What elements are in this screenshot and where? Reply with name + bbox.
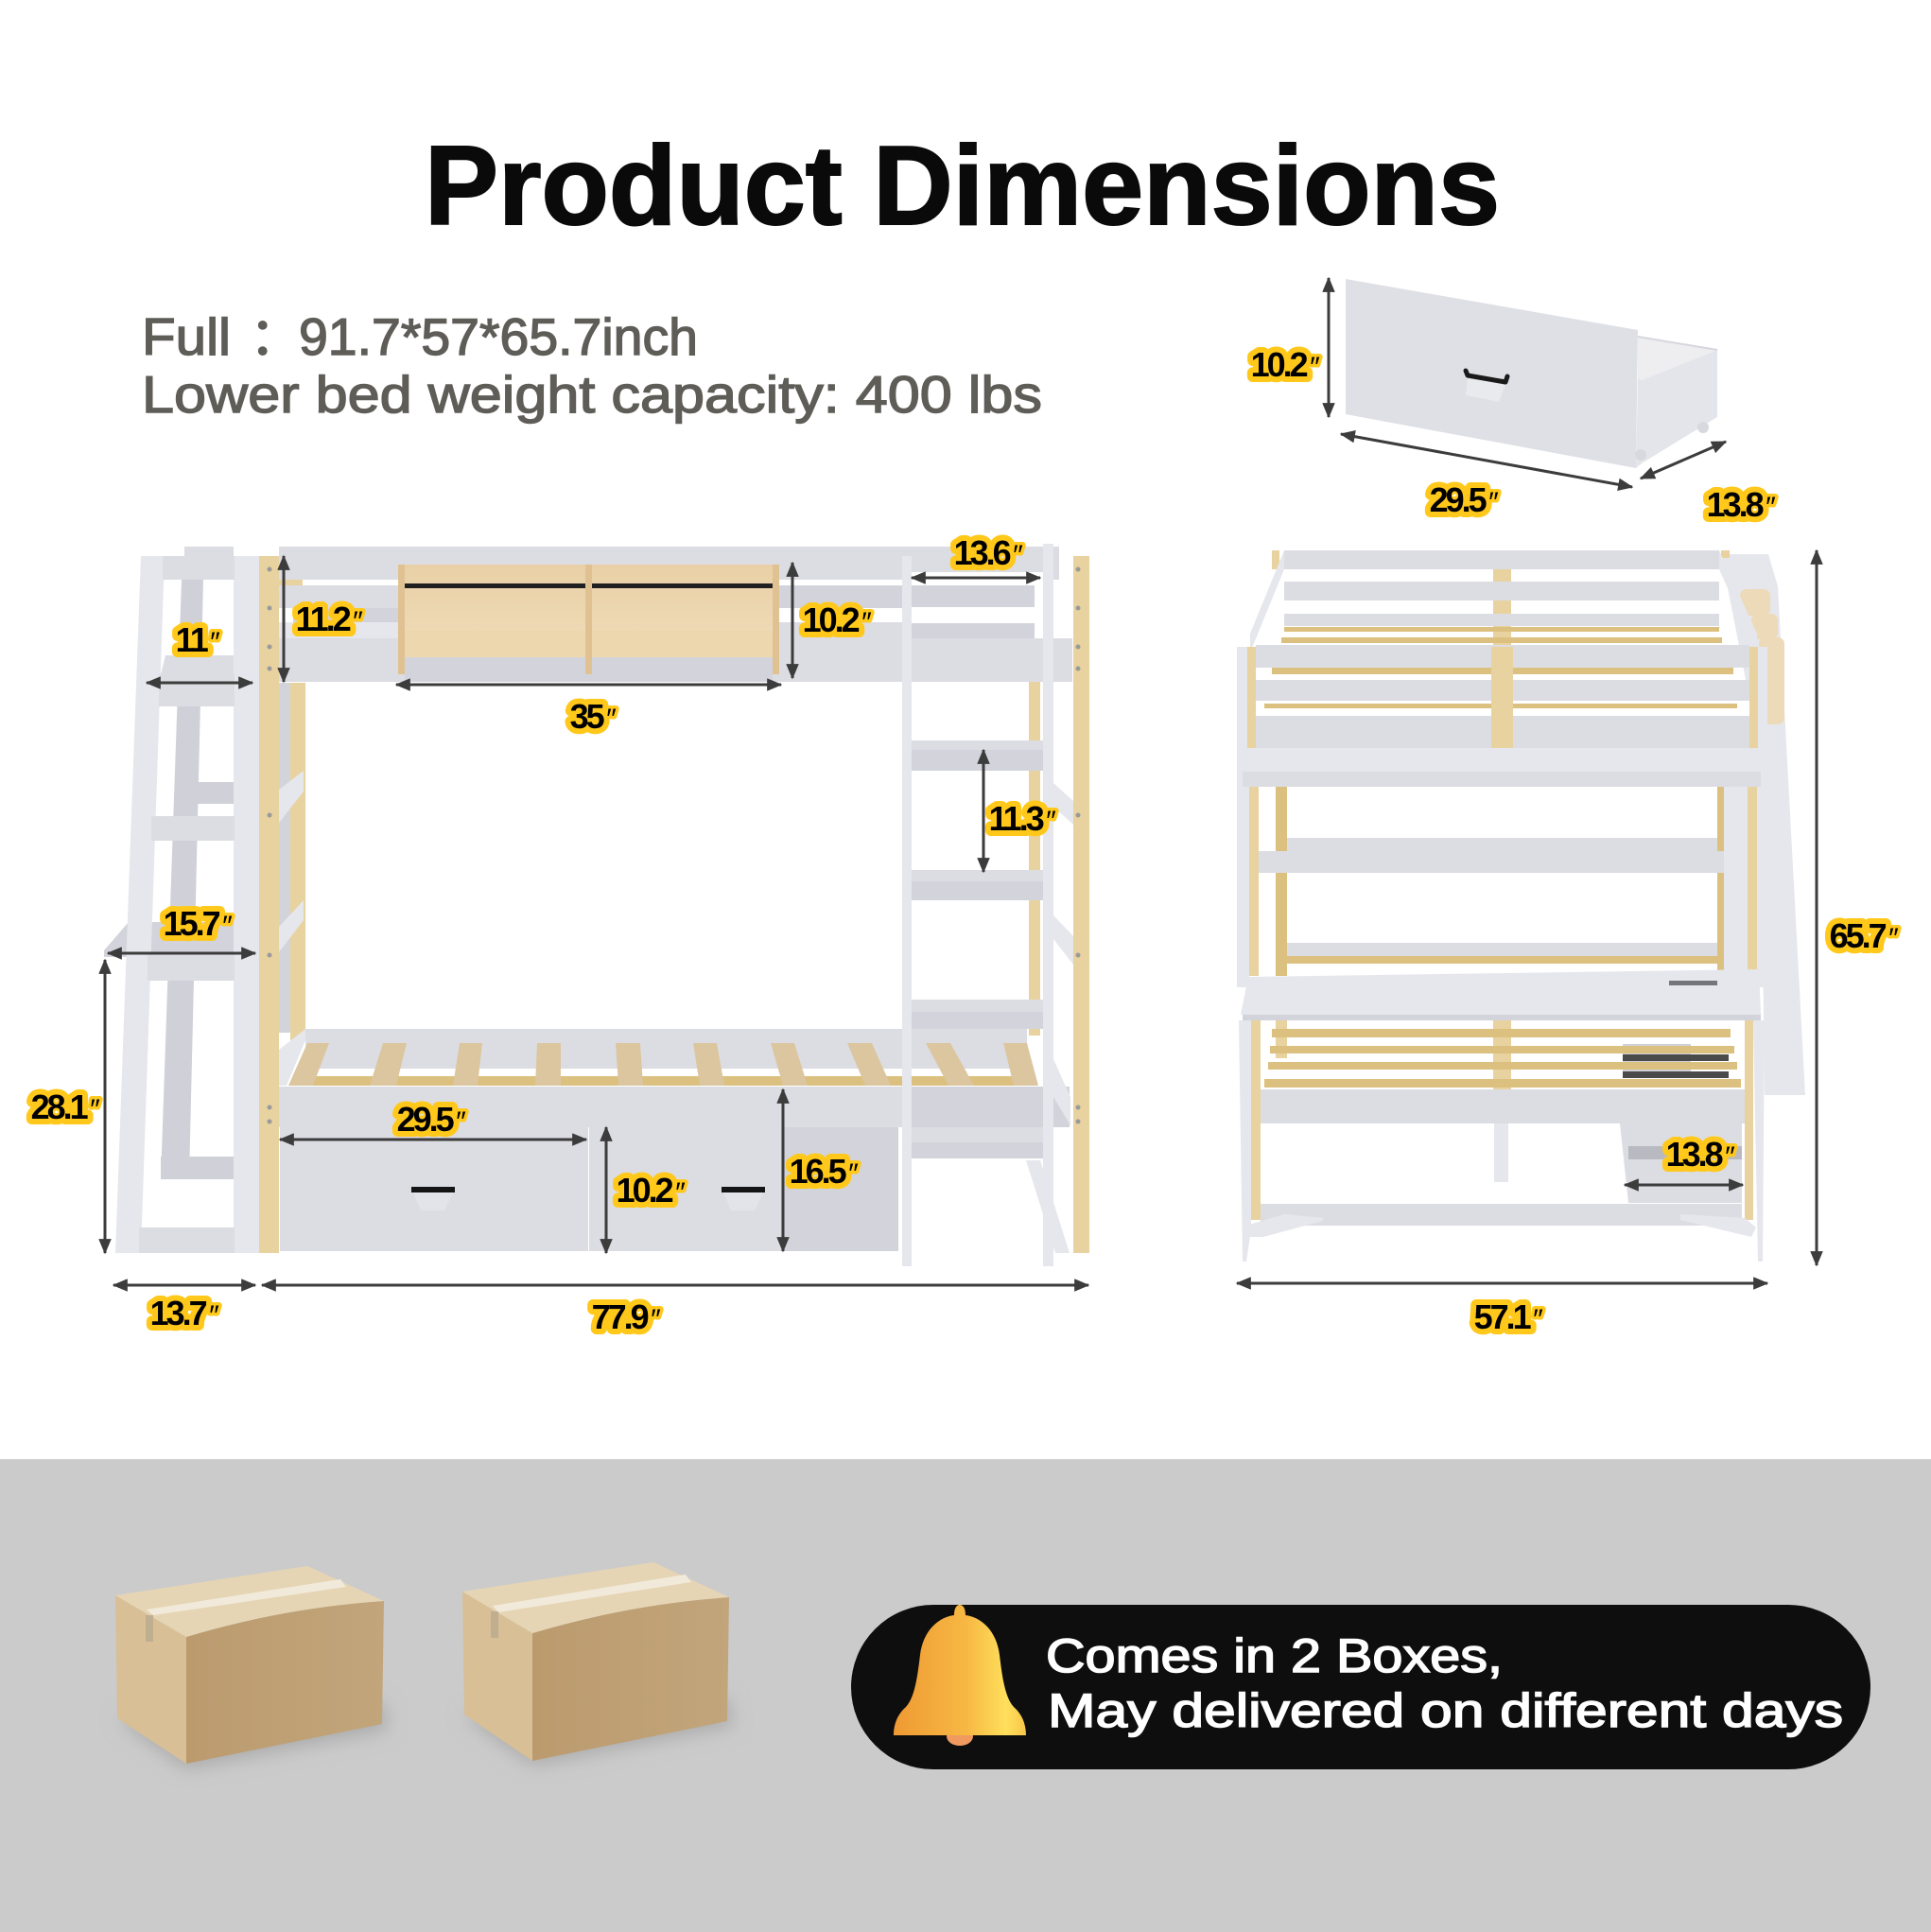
dimension labels: 29.5″ — [1430, 480, 1499, 519]
lower bed slats — [1261, 1020, 1745, 1123]
delivery notice pill — [851, 1605, 1870, 1769]
bottom grey band — [0, 1459, 1931, 1932]
size and weight capacity text: 91.7*57*65.7inch — [299, 307, 698, 366]
dimension labels: 28.1″ — [31, 1088, 100, 1126]
front view of bunk bed — [104, 544, 1089, 1266]
dimension labels: 35″ — [570, 697, 617, 736]
front guard rail — [1247, 645, 1758, 748]
dimension labels: 10.2″ — [617, 1171, 686, 1210]
dimension labels — [31, 345, 1899, 1336]
bookshelf — [398, 565, 779, 682]
title: Product Dimensions — [425, 123, 1500, 249]
side shelf unit — [104, 547, 259, 1253]
notice text: Comes in 2 Boxes, — [1046, 1629, 1503, 1682]
dimension labels: 11.3″ — [989, 799, 1056, 838]
dimension arrows — [105, 278, 1817, 1285]
dimension labels: 11″ — [176, 620, 220, 659]
bolts — [267, 567, 1080, 1123]
drawer illustration — [1346, 279, 1717, 468]
dimension labels: 13.8″ — [1707, 485, 1776, 524]
dimension labels: 13.8″ — [1666, 1135, 1735, 1174]
lower bed with slats — [279, 1029, 1070, 1127]
size and weight capacity text: Lower bed weight capacity: 400 lbs — [142, 365, 1042, 424]
upper back rails — [1250, 550, 1757, 653]
upper desk board — [1243, 748, 1761, 787]
dimension labels: 16.5″ — [790, 1152, 859, 1191]
dimension labels: 77.9″ — [592, 1297, 661, 1336]
posts and mid rail — [1237, 647, 1767, 987]
desk board — [1241, 969, 1761, 1020]
dimension labels: 13.6″ — [954, 533, 1023, 572]
size and weight capacity text: Full — [142, 307, 231, 366]
notice text — [1046, 1629, 1843, 1737]
front wood posts — [259, 556, 1089, 1253]
size and weight capacity text: ： — [250, 307, 302, 366]
dimension labels: 65.7″ — [1830, 916, 1899, 955]
notice text: May delivered on different days — [1048, 1684, 1843, 1737]
dimension labels: 10.2″ — [1251, 345, 1320, 384]
ladder — [902, 544, 1053, 1266]
upper bed frame and rails — [279, 547, 1072, 682]
side view of bunk bed — [1237, 550, 1805, 1262]
under-bed drawers — [280, 1127, 898, 1251]
dimension labels: 10.2″ — [803, 600, 872, 639]
dimension labels: 11.2″ — [296, 600, 363, 638]
diagonal braces — [279, 771, 1073, 1253]
center leg, legs and base rail — [1239, 1020, 1765, 1262]
dimension labels: 57.1″ — [1474, 1297, 1543, 1336]
dimension labels: 15.7″ — [164, 904, 233, 943]
box 1 — [115, 1566, 388, 1768]
dimension labels: 29.5″ — [397, 1100, 466, 1139]
size and weight capacity text — [142, 307, 1042, 424]
back wood posts — [279, 681, 1040, 1040]
icon: bell — [894, 1605, 1026, 1746]
box 2 — [462, 1562, 733, 1765]
climbing ladder side panel — [1721, 554, 1805, 1095]
dimension labels: 13.7″ — [150, 1294, 219, 1332]
